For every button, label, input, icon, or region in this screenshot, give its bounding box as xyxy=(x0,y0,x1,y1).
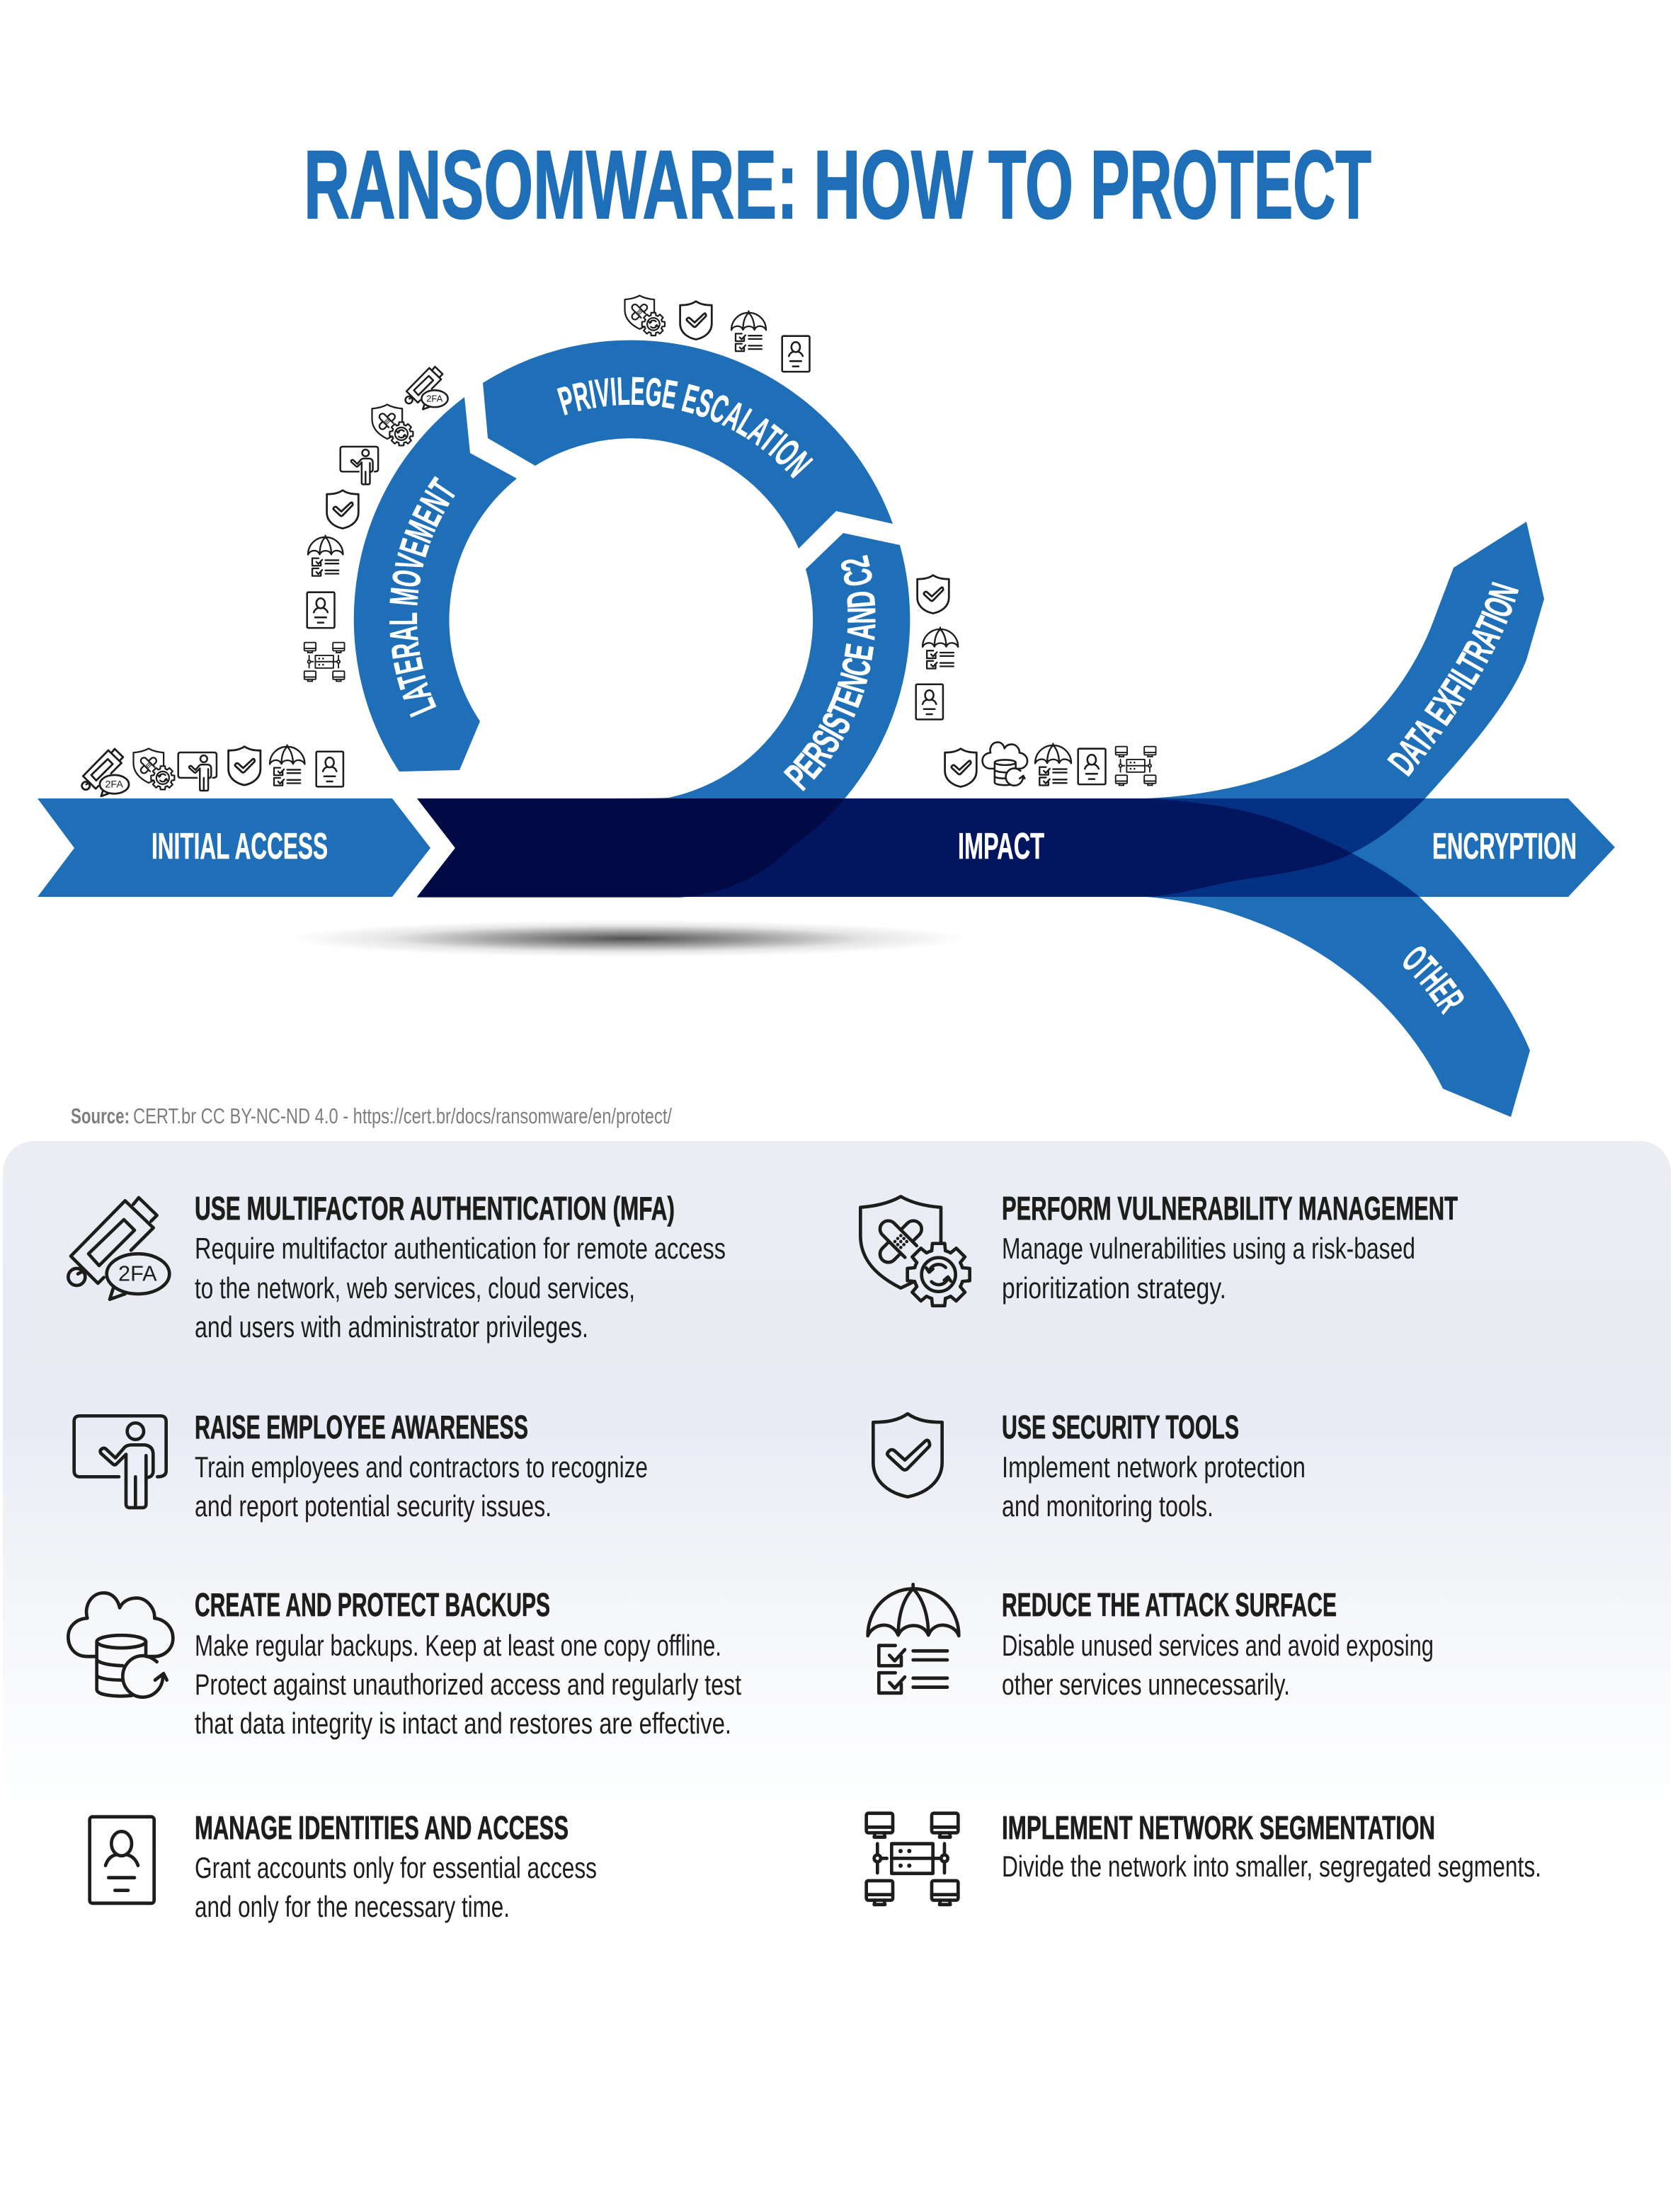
label: lateral movement: LATERAL MOVEMENT xyxy=(389,476,455,718)
panel: recommendations background xyxy=(3,1141,1671,1863)
icon: umbrella xyxy=(731,311,766,351)
icon: vulnerability xyxy=(133,749,174,789)
arrow: data exfiltration xyxy=(417,522,1544,897)
label: data exfiltration: DATA EXFILTRATION xyxy=(1387,582,1519,777)
heading: MANAGE IDENTITIES AND ACCESS xyxy=(195,1809,569,1846)
heading: USE MULTIFACTOR AUTHENTICATION (MFA) xyxy=(195,1190,675,1227)
icon: mfa: 2FA xyxy=(105,779,123,791)
icon: identity xyxy=(316,752,343,786)
label: persistence and c2: PERSISTENCE AND C2 xyxy=(783,555,876,791)
text block: that data integrity is intact and restores are effective. xyxy=(195,1707,731,1740)
icon: presenter xyxy=(341,447,378,484)
text block: prioritization strategy. xyxy=(1002,1271,1226,1305)
icon: vulnerability xyxy=(372,405,413,445)
item: attack surface xyxy=(868,1584,1434,1701)
text block xyxy=(1002,1232,1415,1305)
arc: lateral movement xyxy=(354,397,517,772)
text block xyxy=(1002,1629,1434,1701)
icon: identity xyxy=(307,592,334,628)
icon: vulnerability xyxy=(860,1196,970,1306)
icon: vulnerability xyxy=(624,295,665,336)
arrow: initial access xyxy=(38,798,430,897)
icon: network xyxy=(1116,747,1156,785)
icon: identity xyxy=(916,684,943,719)
label: initial access: INITIAL ACCESS xyxy=(152,826,328,867)
text block: Implement network protection xyxy=(1002,1450,1306,1484)
icon: umbrella xyxy=(1035,744,1071,785)
arrow: encryption xyxy=(417,798,1615,897)
source line: Source: xyxy=(71,1104,130,1128)
label: encryption: ENCRYPTION xyxy=(1432,826,1577,867)
heading: USE SECURITY TOOLS xyxy=(1002,1409,1239,1445)
icon: identity xyxy=(90,1817,154,1903)
icon: backup xyxy=(68,1593,173,1697)
source line: CERT.br CC BY-NC-ND 4.0 - https://cert.br/docs/ransomware/en/protect/ xyxy=(133,1104,672,1128)
icon: shield xyxy=(918,575,949,613)
icon: presenter xyxy=(74,1416,166,1508)
text block xyxy=(195,1629,741,1740)
heading: PERFORM VULNERABILITY MANAGEMENT xyxy=(1002,1190,1458,1227)
text block xyxy=(195,1450,648,1523)
icon row: impact xyxy=(945,743,1156,786)
heading: IMPLEMENT NETWORK SEGMENTATION xyxy=(1002,1809,1435,1846)
arc: privilege escalation xyxy=(483,340,893,549)
item: security tools xyxy=(873,1409,1306,1523)
text block xyxy=(1002,1450,1306,1523)
text block: and only for the necessary time. xyxy=(195,1890,510,1923)
title: TO xyxy=(988,131,1073,239)
icon: shield xyxy=(680,302,712,339)
icon: umbrella xyxy=(270,745,304,786)
text block: Make regular backups. Keep at least one copy offline. xyxy=(195,1629,721,1662)
arc: persistence and C2 xyxy=(417,533,910,898)
heading: RAISE EMPLOYEE AWARENESS xyxy=(195,1409,528,1445)
icon: mfa xyxy=(82,749,129,796)
label: privilege escalation: PRIVILEGE ESCALATION xyxy=(556,377,813,478)
icon row: privilege escalation xyxy=(624,295,809,372)
item: backups xyxy=(68,1586,741,1740)
icon: mfa xyxy=(406,367,448,409)
heading: CREATE AND PROTECT BACKUPS xyxy=(195,1586,550,1623)
title: PROTECT xyxy=(1090,131,1371,239)
text block: Disable unused services and avoid exposing xyxy=(1002,1629,1434,1662)
ground shadow xyxy=(288,920,968,957)
icon column: persistence xyxy=(916,575,958,719)
text block: Require multifactor authentication for remote access xyxy=(195,1232,726,1265)
item: vulnerability management xyxy=(860,1190,1458,1306)
icon: mfa: 2FA xyxy=(118,1262,157,1286)
icon: umbrella xyxy=(308,536,343,576)
icon: shield xyxy=(873,1414,942,1497)
item: network segmentation xyxy=(867,1809,1541,1905)
text block: to the network, web services, cloud services, xyxy=(195,1271,635,1305)
title: RANSOMWARE: xyxy=(304,131,798,239)
item: multifactor authentication xyxy=(68,1190,726,1343)
icon: backup xyxy=(983,743,1027,786)
text block: and users with administrator privileges. xyxy=(195,1310,588,1343)
icon: mfa: 2FA xyxy=(426,393,443,403)
text block: Manage vulnerabilities using a risk-based xyxy=(1002,1232,1415,1265)
text block: Train employees and contractors to recognize xyxy=(195,1450,648,1484)
item: employee awareness xyxy=(74,1409,648,1523)
icon: network xyxy=(867,1813,958,1905)
icon: umbrella xyxy=(923,628,958,668)
text block: and report potential security issues. xyxy=(195,1489,552,1523)
item: identities and access xyxy=(90,1809,597,1923)
text block: and monitoring tools. xyxy=(1002,1489,1214,1523)
text block: other services unnecessarily. xyxy=(1002,1668,1290,1701)
icon: shield xyxy=(327,491,358,528)
icon: shield xyxy=(945,749,976,786)
heading: REDUCE THE ATTACK SURFACE xyxy=(1002,1586,1337,1623)
icon: network xyxy=(304,643,345,681)
icon column: lateral movement xyxy=(304,367,448,681)
icon: umbrella xyxy=(868,1584,959,1693)
text block: Protect against unauthorized access and regularly test xyxy=(195,1668,741,1701)
icon: mfa xyxy=(68,1198,169,1300)
icon: identity xyxy=(1078,749,1105,784)
label: impact: IMPACT xyxy=(958,826,1044,867)
title: HOW xyxy=(813,131,973,239)
label: other: OTHER xyxy=(1403,946,1464,1015)
arrow: other xyxy=(417,798,1530,1117)
icon: presenter xyxy=(178,752,217,791)
text block: Grant accounts only for essential access xyxy=(195,1851,597,1884)
icon: identity xyxy=(782,336,809,372)
text block xyxy=(195,1851,597,1923)
icon: shield xyxy=(229,747,261,785)
icon row: initial access xyxy=(82,745,343,796)
text block xyxy=(195,1232,726,1343)
